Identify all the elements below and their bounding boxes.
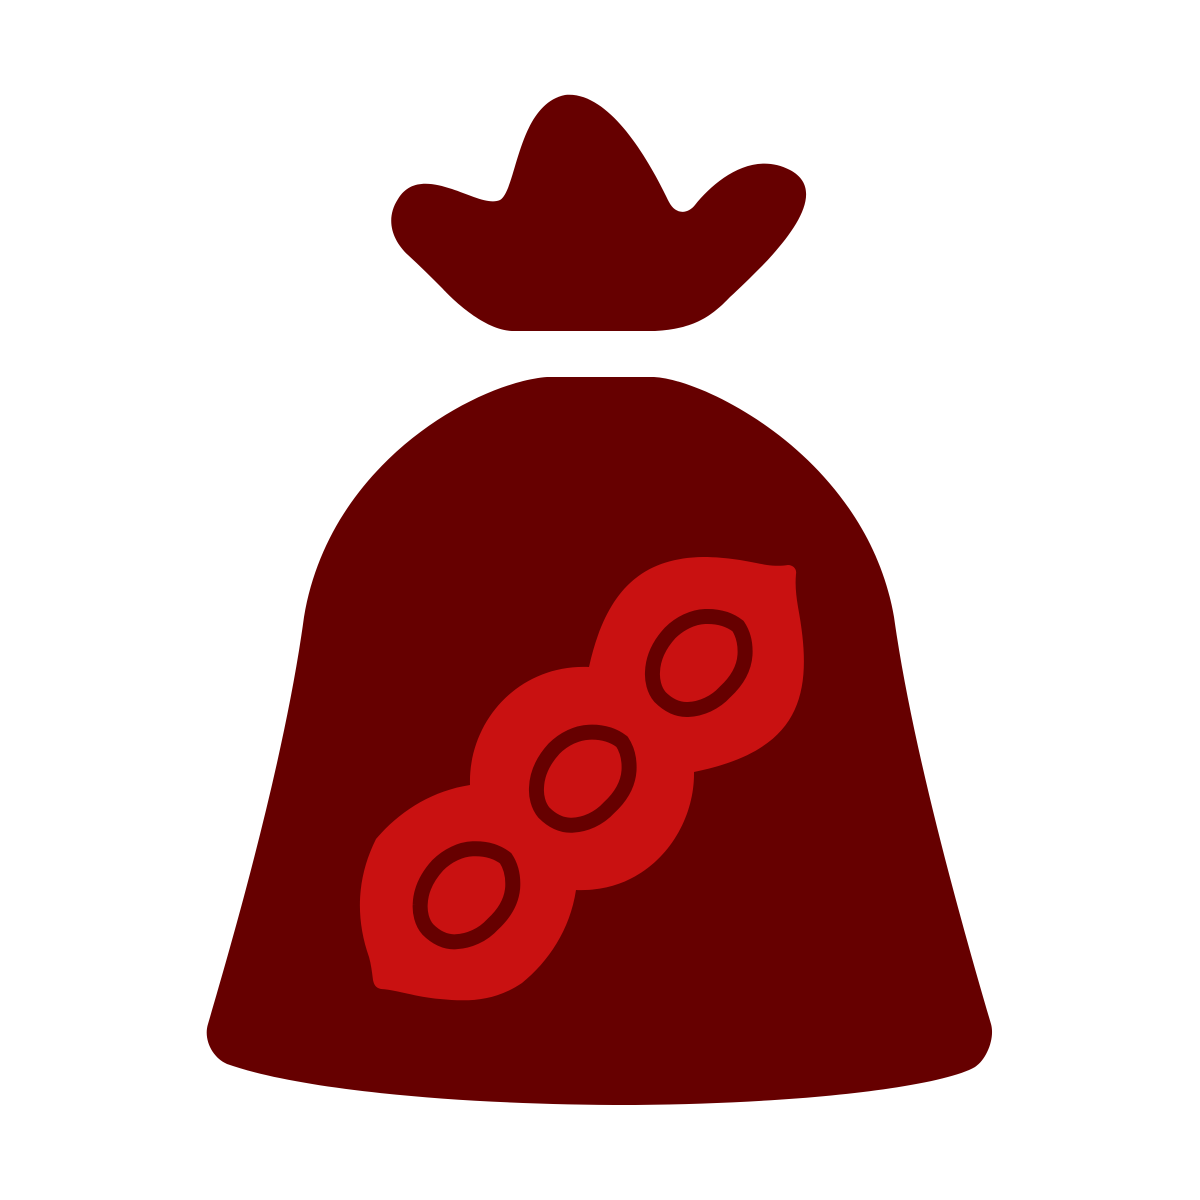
bean seed: top — [652, 616, 745, 710]
bean pod — [360, 557, 804, 1000]
sack top knot — [391, 95, 806, 331]
bean seed: bottom — [420, 849, 513, 942]
bean seed: middle — [536, 732, 629, 825]
sack body — [207, 377, 992, 1105]
